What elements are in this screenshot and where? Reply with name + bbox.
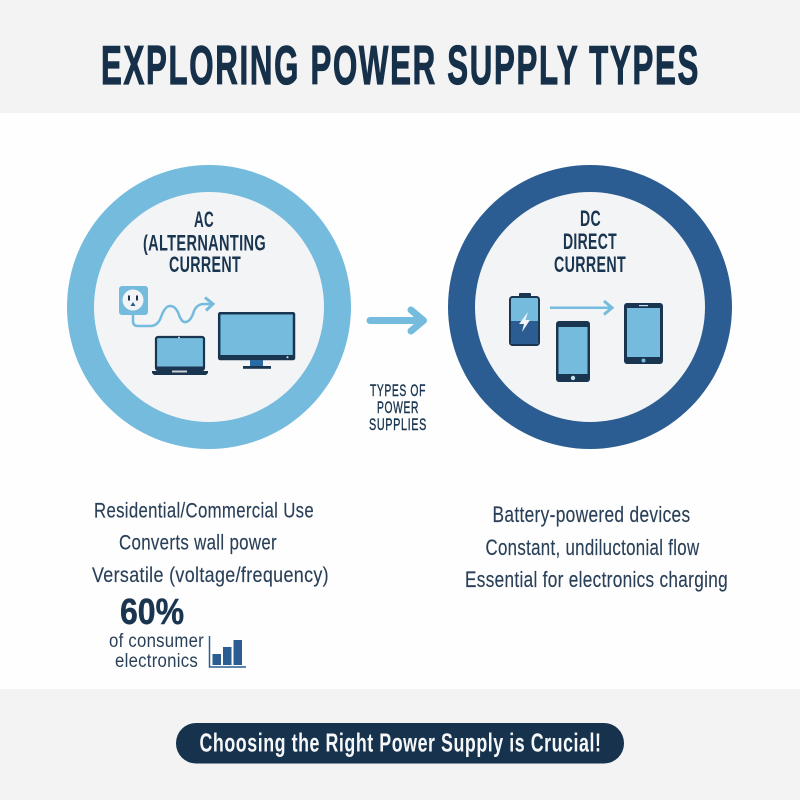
stat: 60 percent of consumer electronics: of consumer	[109, 631, 204, 652]
label: types of power supplies: SUPPLIES	[369, 415, 427, 434]
icon: laptop	[152, 337, 208, 375]
label: types of power supplies	[369, 381, 427, 434]
panel: DC circle	[448, 165, 732, 449]
AC heading: CURRENT	[169, 252, 241, 277]
AC heading: (ALTERNANTING	[143, 230, 266, 256]
DC heading	[554, 206, 626, 277]
panel: AC circle	[67, 165, 351, 449]
icon: tablet	[624, 303, 663, 364]
icon: wall outlet with wavy cord	[119, 286, 213, 326]
icon: flow arrow	[550, 301, 612, 314]
text block: AC features	[92, 500, 329, 587]
callout pill	[176, 723, 624, 764]
DC heading: DC	[580, 206, 601, 231]
label: types of power supplies: TYPES OF	[370, 381, 426, 400]
text block: DC features: Constant, undiluctonial flow	[486, 535, 700, 560]
text block: DC features: Essential for electronics charging	[465, 567, 728, 592]
icon: battery	[510, 293, 539, 345]
footer band	[0, 689, 800, 800]
callout text: Choosing the Right Power Supply is Crucial!	[200, 728, 602, 758]
text block: AC features: Residential/Commercial Use	[94, 500, 314, 522]
stat: 60 percent of consumer electronics: 60%	[120, 591, 184, 632]
label: types of power supplies: POWER	[377, 398, 419, 417]
stat: 60 percent of consumer electronics: electronics	[115, 651, 198, 672]
AC heading: AC	[194, 207, 214, 232]
header band	[0, 0, 800, 113]
stat: 60 percent of consumer electronics	[109, 591, 246, 672]
text block: DC features: Battery-powered devices	[492, 502, 690, 527]
AC heading	[143, 207, 266, 277]
DC heading: CURRENT	[554, 252, 626, 277]
text block: DC features	[465, 502, 728, 592]
text block: AC features: Converts wall power	[119, 532, 277, 554]
icon: monitor	[219, 313, 294, 369]
DC heading: DIRECT	[563, 229, 617, 254]
icon: bar chart	[210, 636, 246, 667]
icon: phone	[556, 321, 590, 382]
text block: AC features: Versatile (voltage/frequency)	[92, 564, 329, 587]
arrow between circles	[370, 310, 424, 331]
